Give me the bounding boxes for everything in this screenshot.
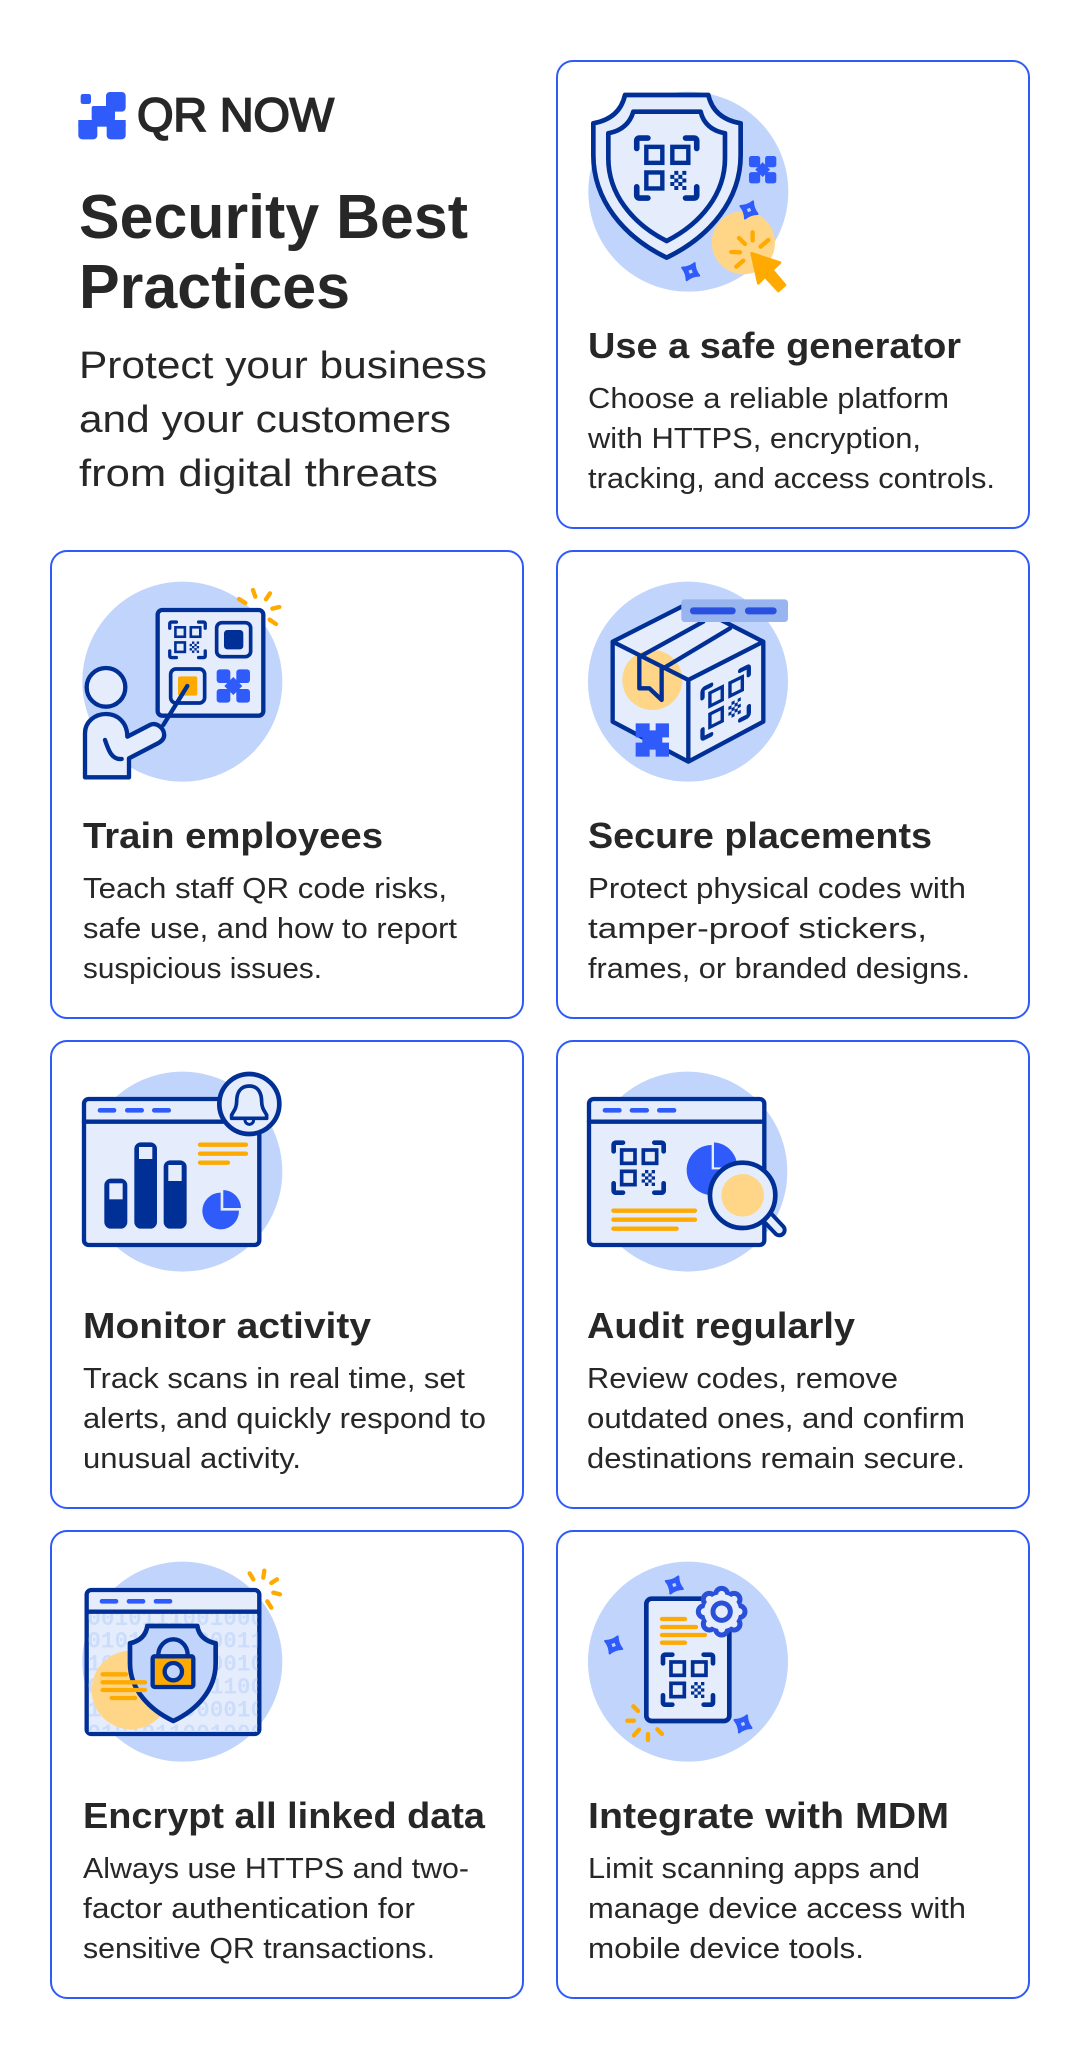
icon: browser window with lock shield: 0100101101100 [87, 1674, 264, 1700]
heading: Train employees [83, 815, 383, 856]
card frame [51, 551, 523, 1018]
heading: Monitor activity [83, 1305, 371, 1346]
body text: Track scans in real time, set [83, 1363, 465, 1395]
body text: frames, or branded designs. [588, 953, 970, 985]
heading: Encrypt all linked data [83, 1795, 486, 1836]
body text: sensitive QR transactions. [83, 1933, 435, 1965]
body text: Protect physical codes with [588, 873, 966, 905]
icon: browser window with lock shield: 0101011001000 [87, 1721, 264, 1747]
panel: integrate with MDM [557, 1531, 1029, 1998]
icon: dashboard with magnifier [587, 1072, 787, 1272]
icon: logo mark [78, 92, 126, 139]
subtitle: from digital threats [79, 453, 438, 495]
icon: browser window with lock shield: 0010111001000 [87, 1606, 264, 1632]
body text: safe use, and how to report [83, 913, 457, 945]
body text: Always use HTTPS and two- [83, 1853, 469, 1885]
body text [588, 873, 970, 985]
subtitle [79, 345, 487, 495]
body text [83, 873, 457, 985]
body text: tamper-proof stickers, [588, 913, 927, 945]
card frame [557, 1531, 1029, 1998]
icon: browser window with lock shield: 1001010100010 [87, 1652, 264, 1678]
panel: use a safe generator [557, 61, 1029, 528]
title: Security Best [79, 183, 468, 252]
body text: alerts, and quickly respond to [83, 1403, 486, 1435]
body text: outdated ones, and confirm [587, 1403, 965, 1435]
body text: Limit scanning apps and [588, 1853, 920, 1885]
body text: destinations remain secure. [587, 1443, 965, 1475]
icon: phone with QR code and gear [588, 1562, 788, 1762]
panel: monitor activity [51, 1041, 523, 1508]
body text: suspicious issues. [83, 953, 322, 985]
body text [588, 1853, 966, 1965]
icon: person pointing at QR board [82, 582, 282, 782]
title [79, 183, 468, 322]
icon: dashboard with charts and bell [82, 1072, 282, 1272]
panel: train employees [51, 551, 523, 1018]
body text: manage device access with [588, 1893, 966, 1925]
icon: shield with QR code and cursor [588, 92, 788, 292]
heading: Use a safe generator [588, 325, 961, 366]
body text: tracking, and access controls. [588, 463, 995, 495]
heading: Integrate with MDM [588, 1795, 949, 1836]
subtitle: Protect your business [79, 345, 487, 387]
card frame [557, 1041, 1029, 1508]
card frame [51, 1041, 523, 1508]
body text: Teach staff QR code risks, [83, 873, 447, 905]
body text [83, 1363, 486, 1475]
heading: Audit regularly [587, 1305, 855, 1346]
body text: unusual activity. [83, 1443, 301, 1475]
logo wordmark: QR NOW [137, 88, 335, 141]
body text [587, 383, 995, 495]
icon: browser window with lock shield: 1010010000010 [87, 1698, 264, 1724]
card frame [557, 61, 1029, 528]
icon: browser window with lock shield [82, 1562, 282, 1762]
body text: with HTTPS, encryption, [587, 423, 921, 455]
body text [587, 1363, 965, 1475]
icon: browser window with lock shield: 0101010100011 [87, 1628, 264, 1654]
panel: audit regularly [557, 1041, 1029, 1508]
body text: Review codes, remove [587, 1363, 898, 1395]
icon: parcel box with QR code [588, 582, 788, 782]
title: Practices [79, 253, 350, 322]
body text [83, 1853, 469, 1965]
heading: Secure placements [588, 815, 932, 856]
body text: Choose a reliable platform [588, 383, 949, 415]
body text: mobile device tools. [588, 1933, 864, 1965]
panel: encrypt all linked data [51, 1531, 523, 1998]
body text: factor authentication for [83, 1893, 415, 1925]
subtitle: and your customers [79, 399, 451, 441]
panel: secure placements [557, 551, 1029, 1018]
card frame [51, 1531, 523, 1998]
card frame [557, 551, 1029, 1018]
logo: QR NOW [78, 88, 335, 141]
